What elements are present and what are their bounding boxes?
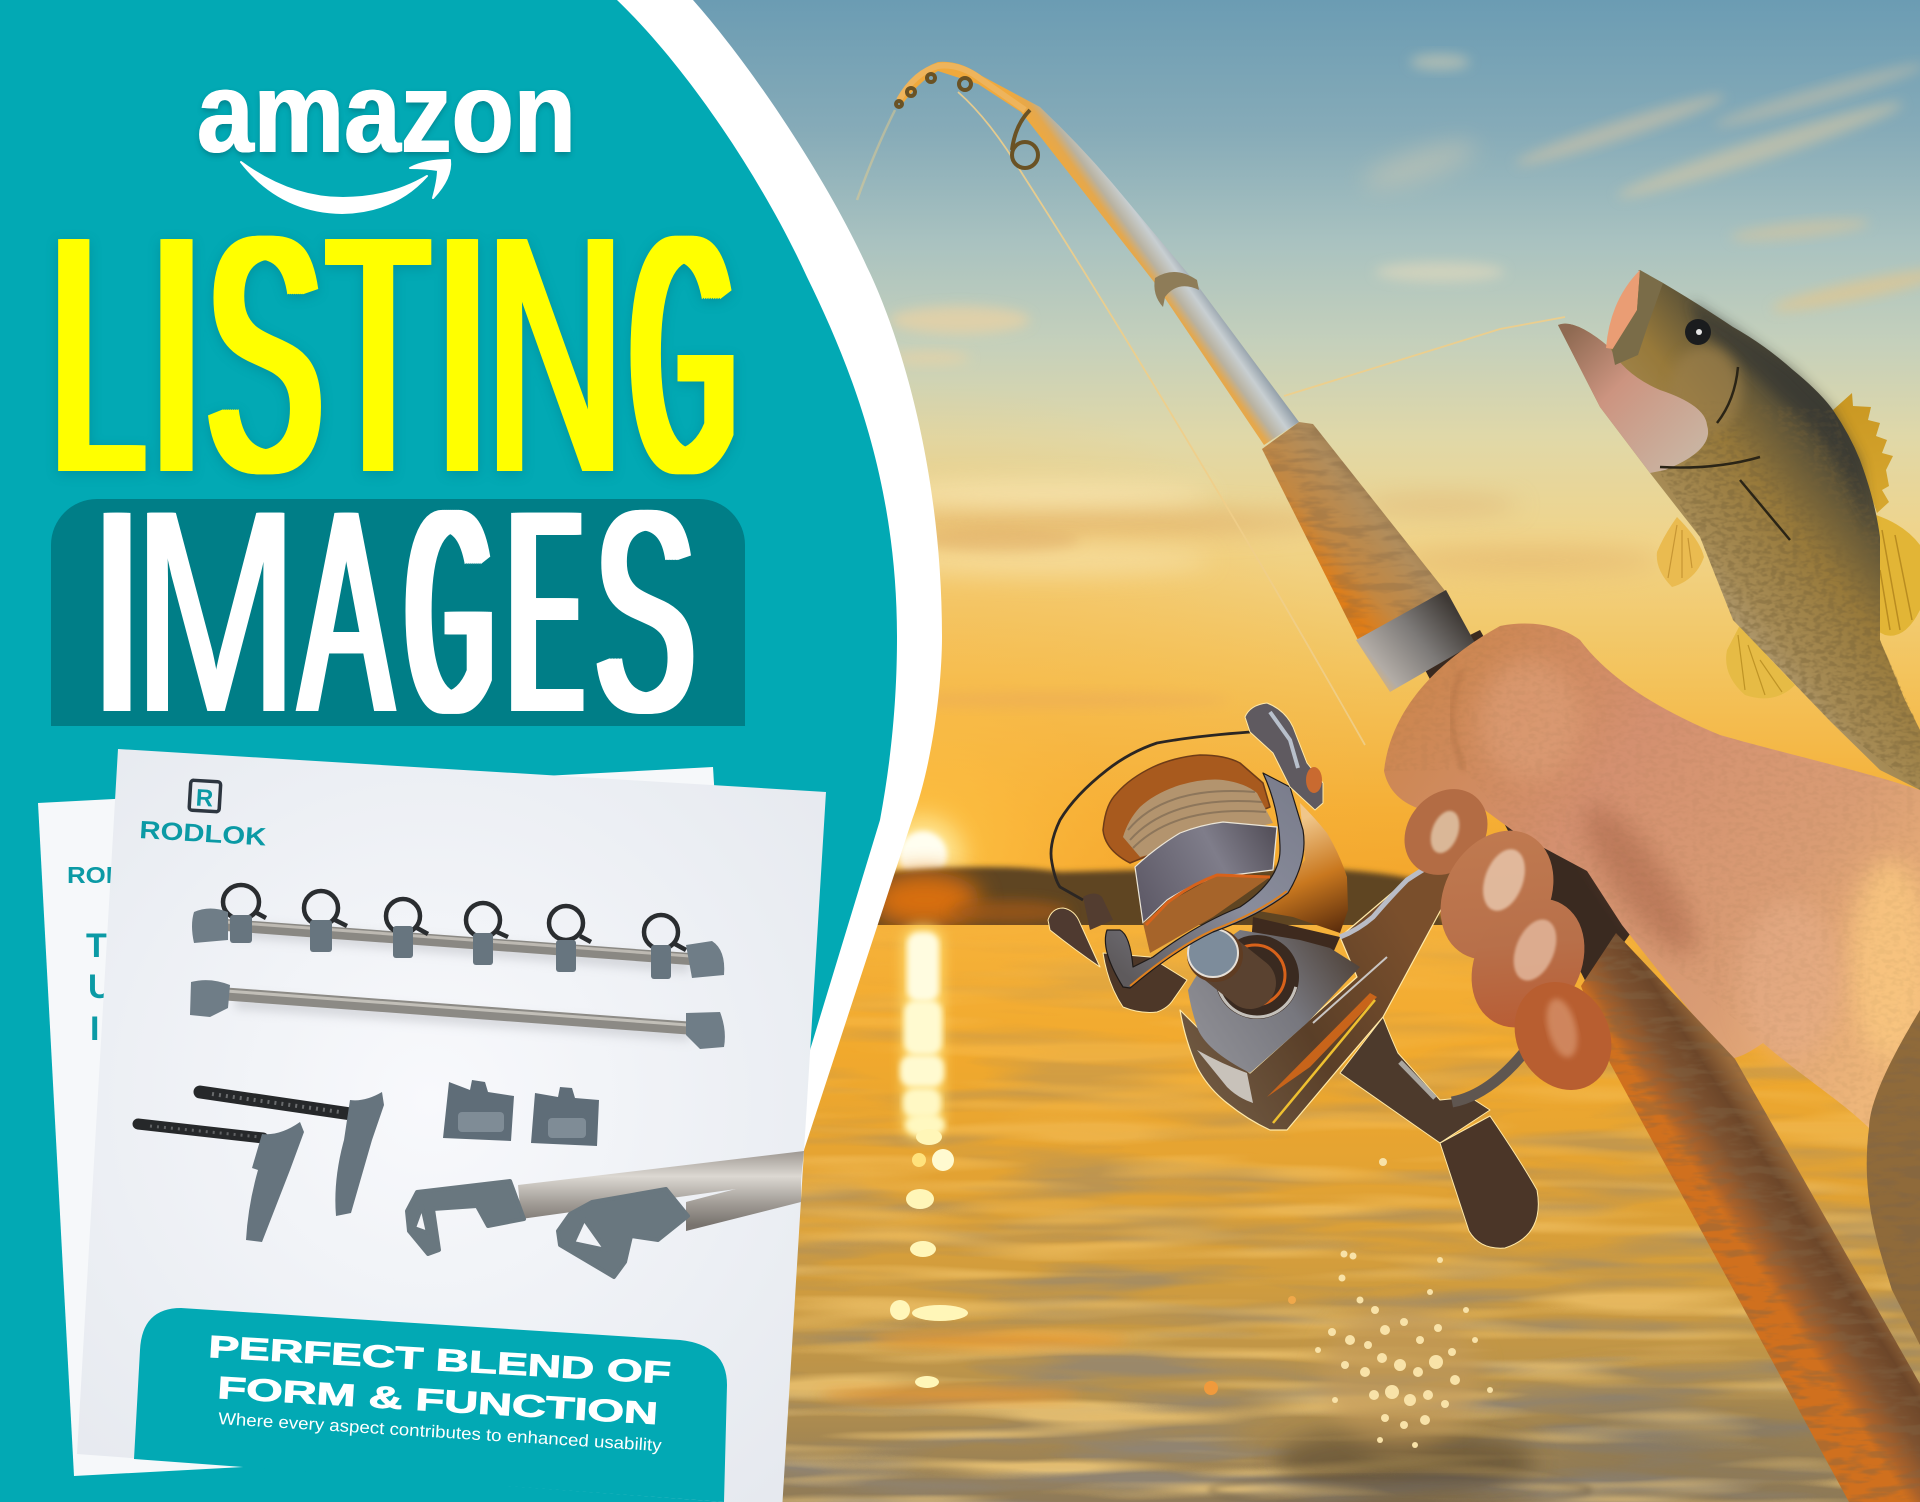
product: rail end caps xyxy=(192,908,724,978)
product: strap clip upper xyxy=(200,1092,384,1216)
photo: lake water xyxy=(782,925,1920,1502)
flyer: back sheet xyxy=(38,767,715,1476)
flyer: back heading fragments: I xyxy=(90,1010,99,1048)
fish: upper jaw xyxy=(1612,270,1663,365)
title: IMAGES: M xyxy=(133,451,299,773)
fish: pectoral fin xyxy=(1657,517,1704,587)
rod: ferrule xyxy=(1154,272,1199,307)
title: LISTING: N xyxy=(486,167,624,543)
flyer: front sheet xyxy=(77,749,826,1502)
title: IMAGES: I xyxy=(97,451,137,773)
reel: bail post xyxy=(1245,703,1323,810)
rod: upper blank xyxy=(899,62,1299,445)
title: LISTING: I xyxy=(440,167,485,543)
reel: body highlight xyxy=(1197,1050,1253,1103)
logo: Rodlok icon: R xyxy=(195,784,214,812)
product: strap clip lower xyxy=(138,1122,304,1242)
title: LISTING: I xyxy=(154,167,198,543)
finger: first xyxy=(1387,772,1505,892)
title: IMAGES: A xyxy=(300,451,392,773)
logo: amazon xyxy=(197,49,576,214)
reel: bail wire xyxy=(1051,732,1250,900)
flyer: teal caption band xyxy=(134,1308,727,1502)
panel: white curved border xyxy=(0,0,942,1502)
reel: rotor knob xyxy=(1187,928,1299,1019)
title: LISTING: S xyxy=(208,167,321,543)
fish: body xyxy=(1558,270,1920,790)
logo: Rodlok wordmark: RODLOK xyxy=(139,816,267,852)
reel: left housing xyxy=(1103,953,1187,1012)
finger: third xyxy=(1449,878,1607,1048)
fish: lower jaw xyxy=(1558,324,1708,473)
fish: open mouth xyxy=(1606,270,1640,350)
caption: headline line two: FORM & FUNCTION xyxy=(217,1370,659,1431)
product: rail clips xyxy=(230,915,671,979)
reel: lower spool rim xyxy=(1143,875,1270,953)
reel: rear housing xyxy=(1253,803,1348,933)
photo: sun disc xyxy=(883,817,963,897)
photo: sky background xyxy=(0,0,1920,935)
fish: cheek xyxy=(1669,346,1741,434)
reel: silver plate xyxy=(1188,930,1360,1073)
title: IMAGES: E xyxy=(510,451,580,773)
reel: spool band xyxy=(1135,822,1277,923)
title: LISTING: T xyxy=(329,167,427,543)
finger: fourth xyxy=(1496,965,1630,1107)
rod: line guides xyxy=(896,74,1038,168)
hand: palm and forearm xyxy=(1384,624,1920,1128)
title: IMAGES: S xyxy=(596,451,693,773)
reel: lower body xyxy=(1180,850,1473,1130)
product: plain rail xyxy=(190,980,725,1049)
fish: dark back shading xyxy=(1690,300,1870,530)
fish: lower fin xyxy=(1726,625,1795,698)
panel: sunset fishing photo and curved teal panel xyxy=(617,0,1920,1502)
title: LISTING: G xyxy=(632,167,734,543)
fish: gill lines xyxy=(1660,367,1790,540)
reel: line on spool xyxy=(1123,780,1273,857)
photo: fish xyxy=(1558,270,1920,790)
flyer: back heading fragments: T xyxy=(86,927,107,965)
panel: teal background xyxy=(0,0,897,1502)
reel: spinning reel xyxy=(1048,703,1538,1248)
reel: handle grip xyxy=(1440,1116,1538,1248)
product: wall mounts xyxy=(443,1080,599,1146)
reel: dark rotor base xyxy=(1250,917,1340,983)
rod: tip highlight xyxy=(899,66,1025,110)
title: IMAGES: G xyxy=(408,451,492,773)
product: straps rings xyxy=(223,885,686,950)
reel: yellow edge line xyxy=(1273,1000,1375,1123)
photo: clouds xyxy=(870,54,1920,708)
hand: fingers xyxy=(1387,772,1630,1107)
reel: stem and strut xyxy=(1340,1017,1526,1143)
logo: Rodlok icon xyxy=(189,780,221,813)
reel: bail arm xyxy=(1105,773,1304,988)
fish: dorsal fin xyxy=(1833,393,1893,513)
caption: subtitle: Where every aspect contributes to enhanced usability xyxy=(218,1409,663,1455)
fish: scale texture xyxy=(1660,400,1920,790)
rod: dark reel seat under hand xyxy=(1420,630,1640,990)
finger: second xyxy=(1418,810,1576,980)
title: IMAGES xyxy=(97,451,694,773)
fish: rear fin xyxy=(1875,515,1920,636)
title: LISTING xyxy=(53,167,736,543)
flyer: back heading fragments xyxy=(86,927,113,1048)
fish: eye xyxy=(1685,319,1711,345)
logo: amazon wordmark: amazon xyxy=(197,49,576,177)
reel: arm highlight xyxy=(1340,850,1473,937)
reel: spool flange xyxy=(1103,755,1270,863)
flyer: back heading fragments: U xyxy=(88,968,113,1006)
product: tube handles xyxy=(407,1181,688,1277)
rod: silver collar xyxy=(1356,590,1475,692)
reel: orange streak xyxy=(1267,993,1377,1097)
photo: fishing line xyxy=(857,92,1565,745)
photo: water splash xyxy=(1204,1158,1590,1502)
caption: headline line one: PERFECT BLEND OF xyxy=(208,1329,672,1391)
title: LISTING: L xyxy=(53,167,143,543)
product: large tubes xyxy=(518,1151,804,1231)
rod: lower handle xyxy=(1581,933,1920,1502)
product: rail with straps xyxy=(192,885,724,979)
hand: sleeve xyxy=(1867,1010,1920,1345)
rod: cork grip xyxy=(1262,422,1446,640)
photo: sun glow xyxy=(400,380,1500,940)
flyer: back logo text: RODLOK xyxy=(67,862,179,888)
title background pill xyxy=(51,499,745,726)
photo: far treeline xyxy=(860,867,1450,930)
photo: sun reflection on water xyxy=(890,925,968,1388)
logo: amazon smile arrow xyxy=(240,159,452,214)
